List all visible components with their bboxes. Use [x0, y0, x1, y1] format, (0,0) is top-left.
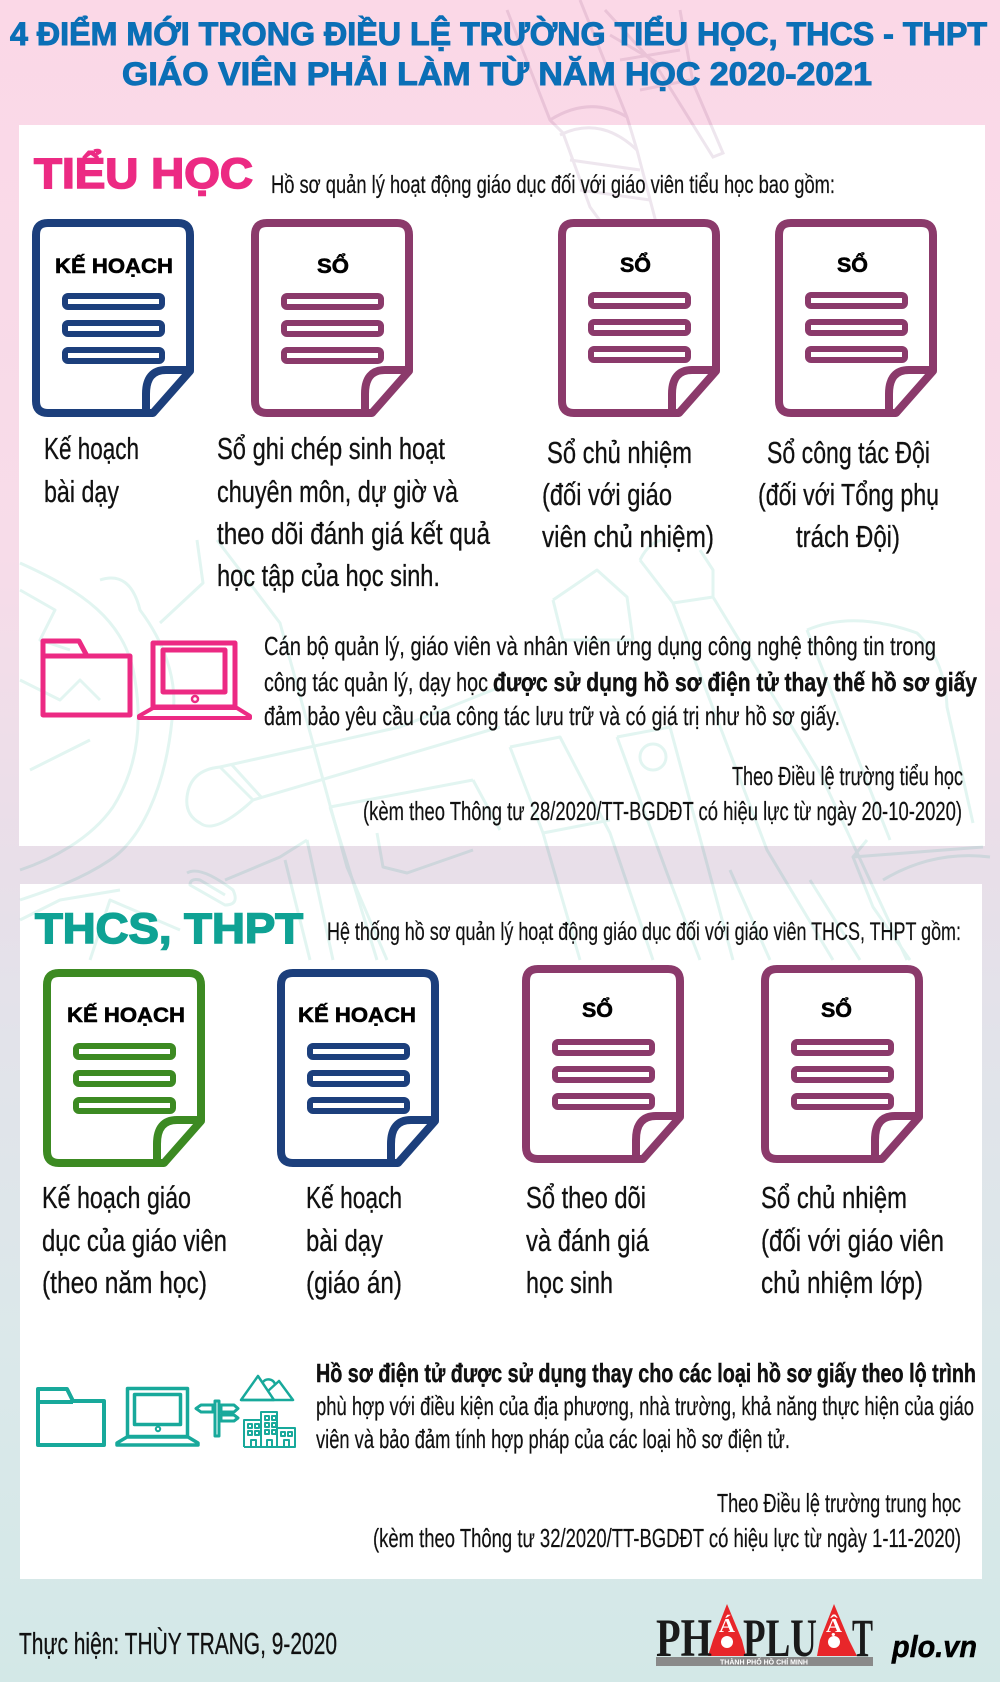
label: sổ công tác đội	[758, 435, 939, 554]
heading: tiểu học: TIỂU HỌC	[34, 149, 253, 198]
label: kế hoạch giáo dục: Kế hoạch giáo	[42, 1180, 191, 1215]
document icon: sổ theo dõi	[526, 969, 680, 1159]
label: sổ ghi chép: chuyên môn, dự giờ và	[217, 474, 459, 509]
paragraph: electronic records	[316, 1358, 976, 1454]
icon: teal laptop	[117, 1388, 198, 1445]
heading: THCS THPT: THCS, THPT	[35, 905, 303, 953]
label: sổ chủ nhiệm: chủ nhiệm lớp)	[761, 1265, 923, 1300]
title: GIÁO VIÊN PHẢI LÀM TỪ NĂM HỌC 2020-2021	[122, 56, 872, 92]
logo: Pháp Luật: Ậ	[826, 1614, 843, 1637]
paragraph: electronic records	[264, 631, 977, 731]
document icon: kế hoạch blue: KẾ HOẠCH	[298, 1004, 416, 1027]
label: sổ chủ nhiệm: (đối với giáo	[542, 477, 672, 512]
label: sổ ghi chép: học tập của học sinh.	[217, 558, 440, 593]
document icon: sổ 1	[255, 223, 409, 413]
label: sổ công tác đội: Sổ công tác Đội	[767, 435, 930, 470]
panel: tiểu học background	[19, 125, 985, 846]
document icon: kế hoạch green	[47, 973, 201, 1163]
document icon: sổ theo dõi: SỔ	[582, 998, 613, 1022]
label: sổ theo dõi	[526, 1180, 650, 1300]
document icon: kế hoạch	[36, 223, 190, 413]
panel: tiểu học	[34, 149, 977, 826]
document icon: sổ chủ nhiệm: SỔ	[821, 998, 852, 1022]
label: kế hoạch bài dạy: bài dạy	[306, 1223, 383, 1258]
logo: Pháp Luật: Á	[719, 1614, 736, 1637]
document icon: kế hoạch blue	[281, 973, 435, 1163]
label: kế hoạch bài dạy: Kế hoạch	[306, 1180, 402, 1215]
label: kế hoạch giáo dục: (theo năm học)	[42, 1265, 207, 1300]
label: sổ theo dõi: học sinh	[526, 1265, 613, 1300]
icon: signpost	[196, 1401, 238, 1436]
icon: buildings	[244, 1412, 295, 1447]
label: kế hoạch bài dạy: (giáo án)	[306, 1265, 402, 1300]
document icon: sổ chủ nhiệm	[765, 969, 919, 1159]
paragraph: electronic records: công tác quản lý, dạy học	[264, 667, 488, 697]
icon: pink laptop	[139, 643, 250, 718]
label: sổ công tác đội: trách Đội)	[796, 519, 900, 554]
icon: mountains	[241, 1376, 293, 1400]
title	[10, 16, 987, 92]
label: sổ chủ nhiệm: Sổ chủ nhiệm	[547, 435, 692, 470]
label: kế hoạch giáo dục: dục của giáo viên	[42, 1223, 227, 1258]
logo: Pháp Luật: PH	[656, 1608, 712, 1668]
label: kế hoạch bài dạy	[306, 1180, 402, 1300]
panel: THCS THPT	[35, 905, 976, 1553]
watermark: pens sketch	[507, 0, 723, 287]
icon: teal folder	[38, 1389, 104, 1445]
logo: Pháp Luật: THÀNH PHỐ HỒ CHÍ MINH	[720, 1656, 808, 1666]
watermark: school tools sketch	[20, 540, 990, 960]
source note	[363, 761, 963, 826]
title: 4 ĐIỂM MỚI TRONG ĐIỀU LỆ TRƯỜNG TIỂU HỌC, THCS - THPT	[10, 16, 987, 52]
document icon: kế hoạch green: KẾ HOẠCH	[67, 1004, 185, 1027]
label: kế hoạch bài dạy: bài dạy	[44, 474, 119, 509]
logo: plo.vn: plo.vn	[891, 1629, 977, 1664]
document icon: sổ 3	[779, 223, 933, 413]
label: sổ công tác đội: (đối với Tổng phụ	[758, 477, 939, 512]
label: kế hoạch bài dạy	[44, 431, 139, 509]
label: sổ chủ nhiệm	[542, 435, 714, 554]
panel: THCS THPT background	[20, 884, 982, 1579]
logo: Pháp Luật	[656, 1604, 873, 1668]
label: sổ chủ nhiệm	[761, 1180, 944, 1300]
label: sổ chủ nhiệm: (đối với giáo viên	[761, 1223, 944, 1258]
source note	[373, 1488, 961, 1553]
document icon: sổ 3: SỔ	[837, 253, 868, 277]
logo: Pháp Luật: PLU	[743, 1608, 817, 1668]
icon: pink folder	[43, 641, 130, 715]
document icon: sổ 2: SỔ	[620, 253, 651, 277]
label: sổ ghi chép: theo dõi đánh giá kết quả	[217, 516, 491, 551]
document icon: sổ 1: SỔ	[317, 254, 349, 278]
credit: Thực hiện: THÙY TRANG, 9-2020	[19, 1626, 337, 1661]
label: sổ chủ nhiệm: viên chủ nhiệm)	[542, 519, 714, 554]
label: sổ ghi chép: Sổ ghi chép sinh hoạt	[217, 431, 445, 466]
paragraph: electronic records: viên và bảo đảm tính hợp pháp của các loại hồ sơ điện tử.	[316, 1424, 790, 1454]
logo: Pháp Luật: T	[852, 1608, 873, 1668]
label: sổ theo dõi: và đánh giá	[526, 1223, 650, 1258]
document icon: sổ 2	[562, 223, 716, 413]
label: kế hoạch bài dạy: Kế hoạch	[44, 431, 139, 466]
label: kế hoạch giáo dục	[42, 1180, 227, 1300]
label: sổ ghi chép	[217, 431, 491, 593]
label: sổ theo dõi: Sổ theo dõi	[526, 1180, 646, 1215]
label: sổ chủ nhiệm: Sổ chủ nhiệm	[761, 1180, 907, 1215]
document icon: kế hoạch: KẾ HOẠCH	[55, 255, 173, 278]
